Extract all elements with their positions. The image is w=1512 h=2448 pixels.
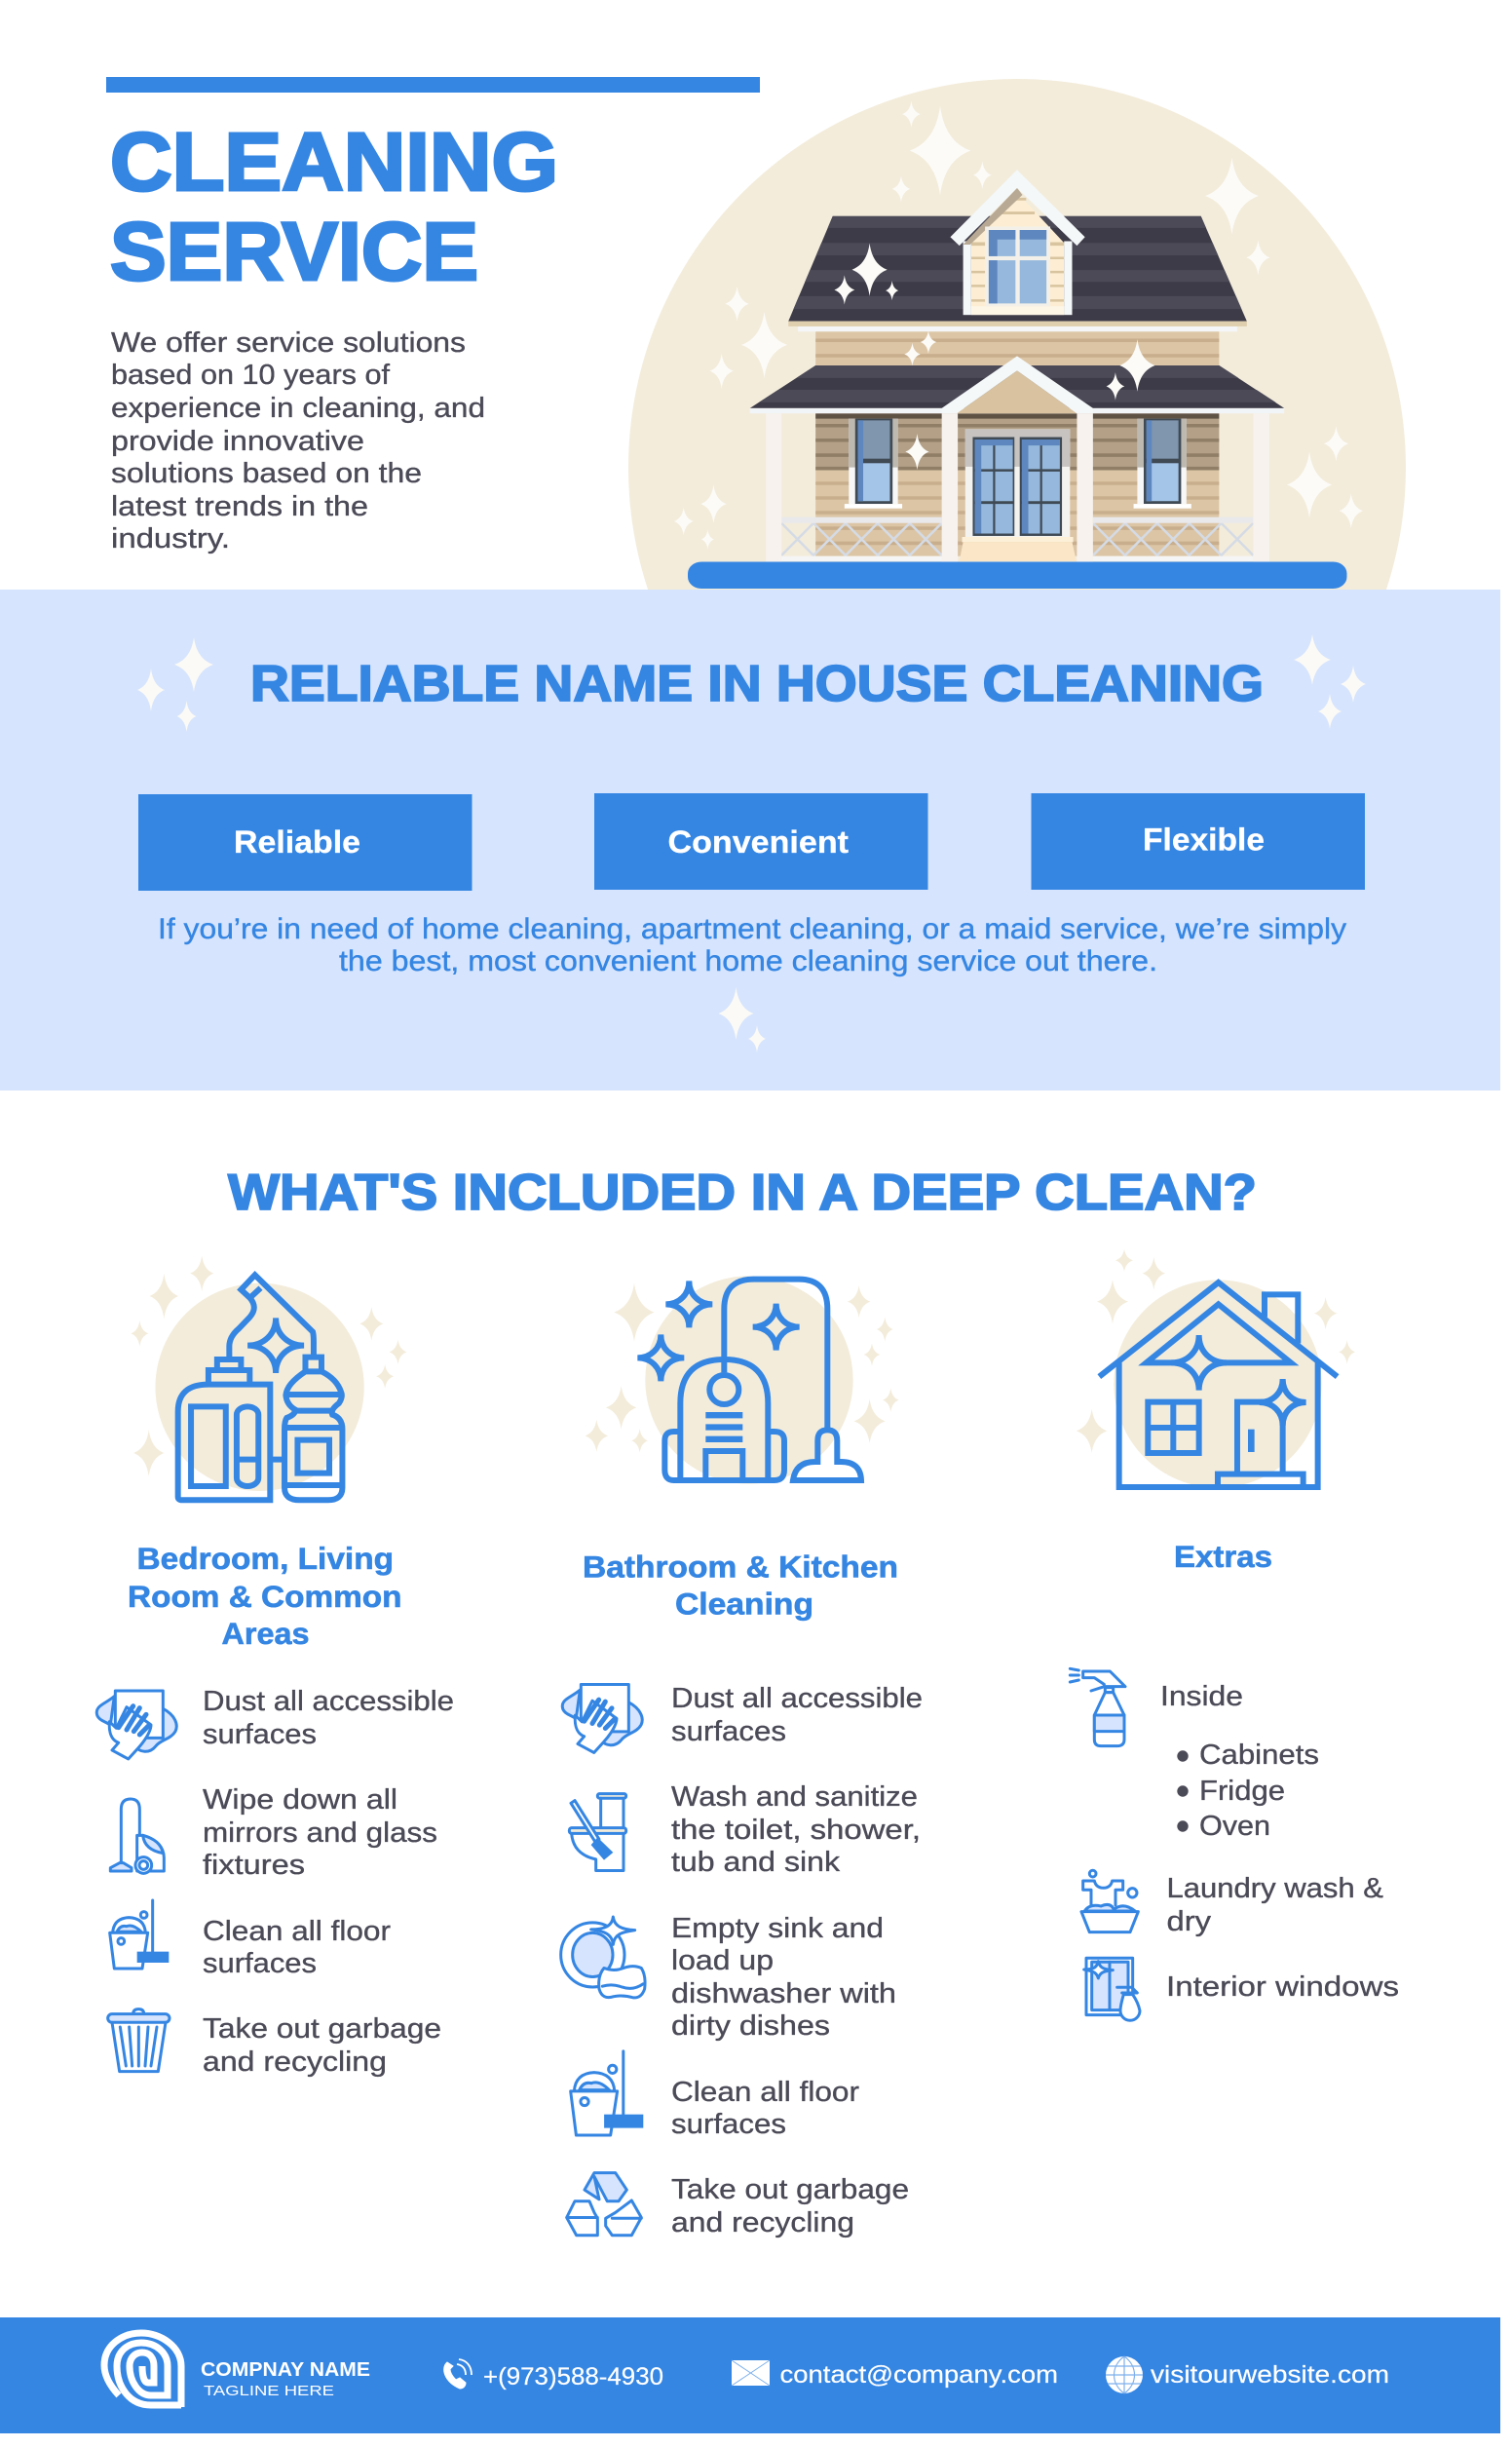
item: garbage: Take out garbage <box>203 2013 441 2045</box>
intro text: provide innovative <box>111 426 364 457</box>
item: dust: surfaces <box>203 1719 317 1750</box>
intro text: based on 10 years of <box>111 360 390 391</box>
item: floor: surfaces <box>203 1948 317 1979</box>
item: floor <box>110 1900 392 1979</box>
column heading: bathroom: Bathroom & Kitchen <box>583 1549 898 1585</box>
bullet list <box>1177 1740 1319 1842</box>
heading: deep clean: WHAT'S INCLUDED IN A DEEP CLEAN? <box>228 1165 1257 1221</box>
item: dust <box>562 1683 923 1752</box>
section heading: RELIABLE NAME IN HOUSE CLEANING <box>250 656 1264 712</box>
list: extras <box>1070 1668 1399 2020</box>
item: floor: surfaces <box>671 2109 786 2140</box>
item: floor <box>571 2051 860 2140</box>
hero backdrop circle <box>628 79 1406 857</box>
website: visitourwebsite.com <box>1151 2361 1389 2389</box>
upper roof <box>785 216 1251 331</box>
item: recycling <box>567 2173 909 2238</box>
item: dishes: dirty dishes <box>671 2010 830 2042</box>
panel description: the best, most convenient home cleaning service out there. <box>339 945 1157 977</box>
button: flexible <box>1031 793 1365 890</box>
lower wall <box>815 413 1219 556</box>
column heading: bathroom: Cleaning <box>675 1587 813 1622</box>
item: inside: Inside <box>1160 1681 1243 1712</box>
list: bathroom <box>561 1683 923 2238</box>
panel description <box>158 913 1346 977</box>
list: bedroom <box>96 1686 454 2078</box>
bullet list: Oven <box>1199 1811 1270 1842</box>
button: flexible: Flexible <box>1143 822 1265 858</box>
item: wipe: fixtures <box>203 1850 305 1881</box>
item: wipe <box>110 1784 437 1881</box>
item: inside <box>1070 1668 1319 1842</box>
icon: company logo <box>104 2333 181 2407</box>
item: wipe: Wipe down all <box>203 1784 397 1816</box>
bullet list: Cabinets <box>1199 1740 1319 1771</box>
item: toilet <box>569 1781 921 1878</box>
panel description: If you’re in need of home cleaning, apartment cleaning, or a maid service, we’re simply <box>158 913 1346 945</box>
panel sparkles <box>137 634 1366 1052</box>
item: dishes <box>561 1913 896 2042</box>
intro text: experience in cleaning, and <box>111 393 485 424</box>
footer <box>0 2317 1500 2433</box>
icon: clean house <box>1077 1249 1355 1488</box>
column heading: bedroom: Bedroom, Living <box>136 1541 394 1576</box>
column heading: bedroom <box>128 1541 401 1651</box>
bullet list: Fridge <box>1199 1776 1285 1807</box>
item: garbage: and recycling <box>203 2046 387 2078</box>
item: laundry <box>1081 1870 1383 1937</box>
hero sparkles <box>674 101 1363 550</box>
intro text: industry. <box>111 523 230 555</box>
intro text: solutions based on the <box>111 458 422 489</box>
item: dishes: Empty sink and <box>671 1913 884 1944</box>
title: CLEANING <box>110 116 558 208</box>
item: dishes: load up <box>671 1945 774 1976</box>
item: dust: surfaces <box>671 1716 786 1747</box>
item: laundry: dry <box>1167 1906 1212 1937</box>
item: wipe: mirrors and glass <box>203 1817 437 1849</box>
company name <box>201 2359 370 2399</box>
item: recycling: and recycling <box>671 2207 854 2238</box>
item: windows <box>1084 1958 1399 2020</box>
item: dust: Dust all accessible <box>671 1683 923 1714</box>
house illustration <box>674 101 1363 561</box>
company name: COMPNAY NAME <box>201 2359 370 2381</box>
side windows <box>845 419 1191 509</box>
item: floor: Clean all floor <box>671 2077 860 2108</box>
button: convenient <box>594 793 927 890</box>
company name: TAGLINE HERE <box>204 2383 334 2399</box>
email: contact@company.com <box>779 2361 1058 2389</box>
button: reliable: Reliable <box>234 824 360 860</box>
icon: cleaning bottles <box>131 1255 406 1500</box>
column heading: bedroom: Room & Common <box>128 1579 401 1614</box>
button: convenient: Convenient <box>668 824 849 860</box>
column heading: extras: Extras <box>1174 1539 1272 1574</box>
item: dust: Dust all accessible <box>203 1686 454 1717</box>
item: toilet: Wash and sanitize <box>671 1781 918 1813</box>
item: dust <box>96 1686 454 1759</box>
item: dishes: dishwasher with <box>671 1978 896 2009</box>
front door <box>960 429 1077 561</box>
icon: phone <box>444 2359 472 2389</box>
button: reliable <box>138 794 472 891</box>
item: windows: Interior windows <box>1166 1971 1399 2003</box>
icon: mail <box>732 2360 770 2386</box>
phone number: +(973)588-4930 <box>483 2363 663 2391</box>
icon: vacuum cleaner <box>586 1276 899 1484</box>
icon: globe <box>1106 2356 1143 2393</box>
intro text: We offer service solutions <box>111 327 466 359</box>
item: toilet: the toilet, shower, <box>671 1815 921 1846</box>
title <box>110 116 558 297</box>
title: SERVICE <box>110 206 478 297</box>
item: floor: Clean all floor <box>203 1916 392 1947</box>
item: laundry: Laundry wash & <box>1167 1873 1383 1904</box>
upper wall <box>815 331 1219 365</box>
porch posts <box>766 413 1269 561</box>
porch railing <box>781 517 1253 561</box>
intro text: latest trends in the <box>111 491 368 522</box>
item: toilet: tub and sink <box>671 1847 841 1878</box>
dormer <box>950 170 1085 315</box>
item: recycling: Take out garbage <box>671 2174 909 2205</box>
top accent bar <box>106 77 760 93</box>
intro text <box>111 327 485 555</box>
column heading: bathroom <box>583 1549 898 1622</box>
item: garbage <box>108 2009 441 2078</box>
panel: reliable name <box>0 590 1500 1090</box>
lower roof <box>750 356 1284 413</box>
column heading: bedroom: Areas <box>222 1616 310 1651</box>
hero blue ground bar <box>688 561 1346 589</box>
